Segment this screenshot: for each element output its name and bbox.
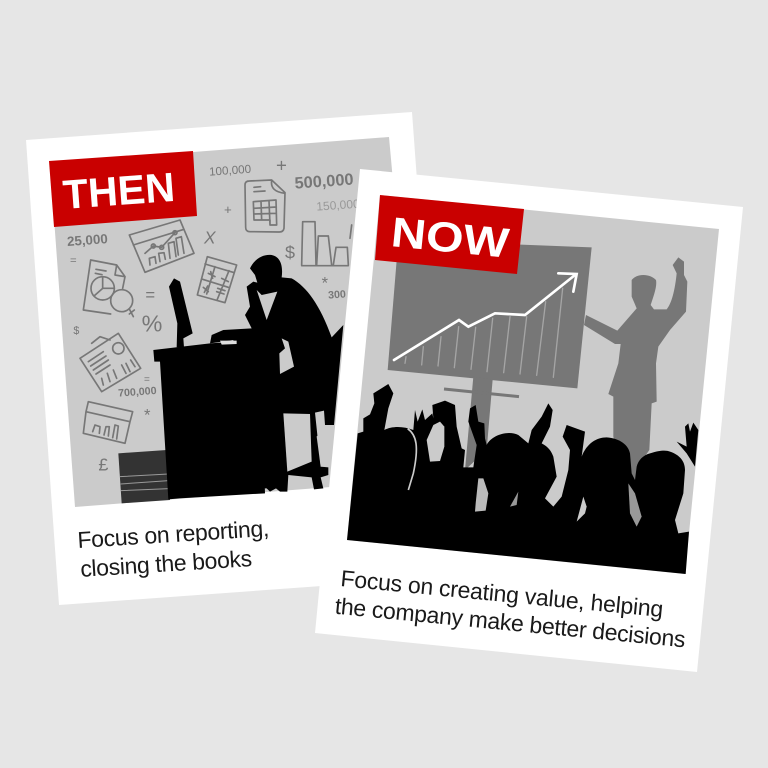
numbers and symbols: 700,000 [118, 385, 157, 400]
numbers and symbols [66, 155, 360, 475]
icon: monitor [169, 278, 193, 347]
icon: finance doodles [80, 180, 352, 443]
numbers and symbols: = [144, 375, 150, 386]
caption: now: Focus on creating value, helping [340, 565, 665, 622]
caption: then: Focus on reporting, [77, 515, 270, 553]
caption: now: the company make better decisions [334, 593, 687, 652]
numbers and symbols: + [224, 202, 232, 217]
badge: THEN [49, 151, 197, 227]
numbers and symbols: * [144, 406, 151, 425]
numbers and symbols: X [203, 227, 217, 247]
badge: NOW [375, 195, 524, 274]
numbers and symbols: % [142, 311, 162, 337]
person silhouette with chair [210, 255, 343, 492]
now photo background [347, 195, 719, 574]
gaps in crowd [408, 422, 642, 527]
desk [153, 340, 265, 499]
numbers and symbols: = [70, 255, 77, 267]
badge: THEN: THEN [61, 164, 176, 218]
numbers and symbols: = [145, 286, 155, 305]
numbers and symbols: £ [98, 455, 108, 475]
gaps in person silhouette [220, 290, 333, 472]
numbers and symbols: 25,000 [66, 231, 108, 249]
now illustration [388, 240, 592, 470]
panel: now card [315, 169, 743, 672]
numbers and symbols: $ [285, 242, 295, 262]
crowd silhouette [347, 384, 698, 574]
numbers and symbols: + [276, 155, 287, 176]
panel: then card [26, 112, 446, 605]
presentation board [388, 240, 592, 470]
numbers and symbols: $ [73, 325, 79, 337]
presenter silhouette [584, 257, 687, 527]
line chart [394, 273, 577, 377]
numbers and symbols: 150,000 [316, 197, 360, 214]
numbers and symbols: 100,000 [209, 163, 252, 179]
paper stack [118, 450, 170, 503]
numbers and symbols: 300 [328, 288, 346, 302]
caption: then: closing the books [80, 545, 253, 582]
numbers and symbols: 500,000 [294, 171, 354, 193]
numbers and symbols: * [322, 273, 329, 292]
badge: NOW: NOW [389, 208, 512, 267]
then photo background [50, 137, 420, 507]
then illustration [66, 155, 360, 503]
